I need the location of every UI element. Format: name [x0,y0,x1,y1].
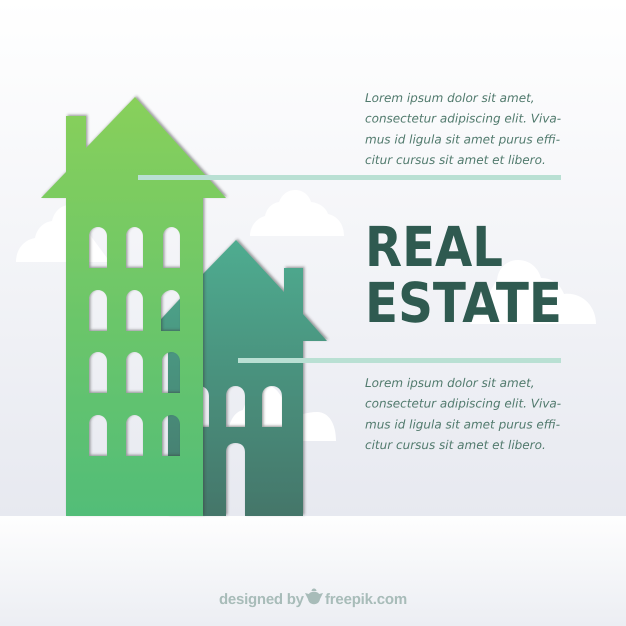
text block: bottom [365,376,561,452]
building: green tower [41,97,226,516]
divider line: top [138,175,561,180]
building: teal house [150,240,327,516]
cloud: upper center [250,190,344,236]
footer credit [219,588,407,608]
text block: top [365,91,561,167]
text block: top: citur cursus sit amet et libero. [365,153,546,167]
cloud: right behind title [470,260,596,324]
divider line: bottom [238,358,561,363]
text block: top: Lorem ipsum dolor sit amet, [365,91,535,105]
text block: bottom: Lorem ipsum dolor sit amet, [365,376,535,390]
title: ESTATE [365,271,562,335]
cloud: lower center [228,385,336,441]
icon: freepik logo [305,588,323,604]
text block: top: mus id ligula sit amet purus effi- [365,132,560,146]
text block: top: consectetur adipiscing elit. Viva- [365,112,561,126]
text block: bottom: consectetur adipiscing elit. Viva- [365,396,561,410]
cloud: left [16,205,110,262]
text block: bottom: mus id ligula sit amet purus effi- [365,418,560,432]
title [365,215,562,335]
floor [0,516,626,626]
footer credit: designed by [219,591,305,608]
footer credit: freepik.com [325,591,407,608]
title: REAL [365,215,503,279]
text block: bottom: citur cursus sit amet et libero. [365,438,546,452]
